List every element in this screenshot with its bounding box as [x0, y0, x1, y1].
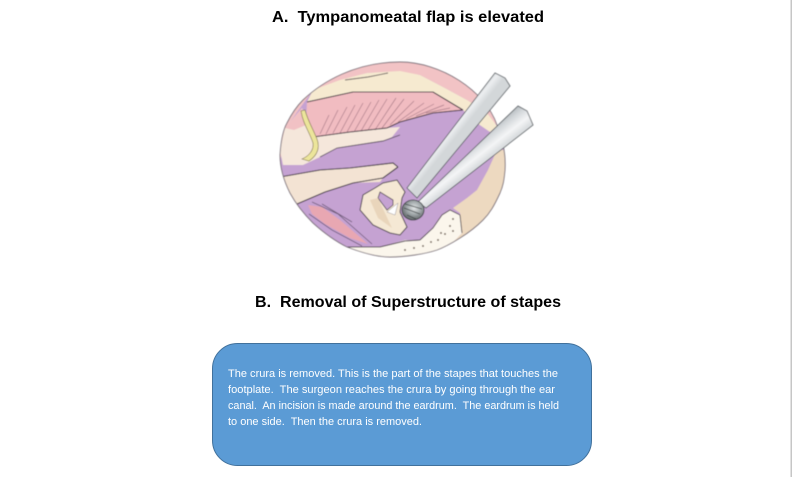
- illustration: surgical view through the ear canal: [275, 55, 533, 265]
- instrument: lower forceps arm: [418, 106, 533, 208]
- instrument tip: [402, 200, 424, 220]
- page edge line: [790, 0, 792, 477]
- callout box: [212, 344, 592, 466]
- callout text: to one side. Then the crura is removed.: [228, 416, 422, 428]
- callout text: The crura is removed. This is the part of the stapes that touches the: [228, 368, 558, 380]
- callout text: [228, 368, 559, 428]
- callout text: footplate. The surgeon reaches the crura by going through the ear: [228, 384, 555, 396]
- heading B: B. Removal of Superstructure of stapes: [255, 294, 561, 311]
- ear canal outline: [280, 62, 505, 257]
- heading A: A. Tympanomeatal flap is elevated: [272, 9, 544, 26]
- stapes bones: [360, 180, 407, 235]
- instrument: upper forceps arm: [407, 73, 510, 198]
- callout text: canal. An incision is made around the eardrum. The eardrum is held: [228, 400, 559, 412]
- page artwork: [212, 0, 792, 477]
